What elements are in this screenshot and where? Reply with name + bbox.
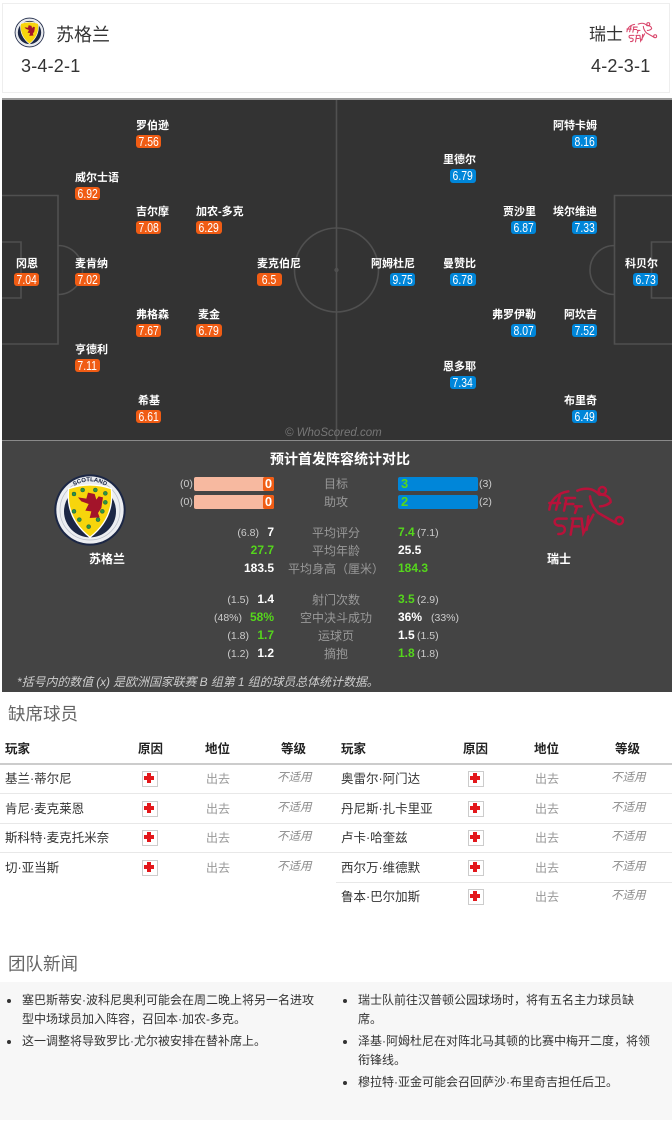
icon: Scotland crest small: [14, 18, 44, 48]
heading: missing players: 缺席球员: [8, 704, 78, 724]
news item: away 1: 席。: [358, 1012, 382, 1026]
row: 肯尼·麦克莱恩: 出去: [206, 802, 230, 816]
player: 布里奇: 6.49: [575, 409, 595, 424]
player: 麦克伯尼: 6.5: [262, 272, 277, 287]
player: 罗伯逊: 7.56: [139, 134, 159, 149]
panel: missing players away table: [336, 740, 672, 910]
stat row: shots: (2.9): [417, 594, 439, 606]
away assists bar: [398, 495, 478, 509]
stat row: dribbles: [227, 628, 439, 643]
stat row: shots: 1.4: [257, 592, 274, 606]
away goals bar: [398, 477, 478, 491]
row: 丹尼斯·扎卡里亚: 出去: [535, 802, 559, 816]
player: 里德尔: 里德尔: [443, 154, 476, 166]
row: 斯科特·麦克托米奈: 斯科特·麦克托米奈: [5, 831, 109, 845]
footnote: *括号内的数值 (x) 是欧洲国家联赛 B 组第 1 组的球员总体统计数据。: [17, 675, 379, 689]
icon: Scotland crest: SCOTLAND: [72, 477, 107, 486]
stat row: average height: 平均身高（厘米）: [288, 562, 384, 576]
stat bars: goals: [180, 476, 492, 491]
away formation: 4-2-3-1: [591, 56, 650, 76]
away assists average: (2): [479, 496, 492, 508]
news item: away 3: 穆拉特·亚金可能会召回萨沙·布里奇吉担任后卫。: [358, 1075, 618, 1089]
home team name: 苏格兰: [56, 25, 110, 45]
stat row: average age: 平均年龄: [312, 544, 360, 558]
player: 希基: 6.61: [139, 409, 159, 424]
stat row: average rating: 7.4: [398, 525, 415, 539]
stat bars: assists: [180, 494, 492, 509]
watermark: © WhoScored.com: [285, 427, 382, 439]
player: 埃尔维迪: 7.33: [575, 220, 595, 235]
player: 阿特卡姆: 阿特卡姆: [553, 120, 597, 132]
panel: team news: [0, 982, 672, 1120]
player: 弗格森: 7.67: [139, 323, 159, 338]
player: 威尔士语: [75, 172, 119, 201]
stat row: tackles: 摘抱: [324, 647, 348, 661]
stats title: 预计首发阵容统计对比: [270, 451, 410, 467]
stat row: tackles: 1.8: [398, 646, 415, 660]
stat row: aerial duels: (48%): [214, 612, 242, 624]
stat row: dribbles: (1.8): [227, 630, 249, 642]
away team name: 瑞士: [589, 25, 623, 44]
player: 里德尔: [443, 154, 476, 183]
player: 麦克伯尼: 麦克伯尼: [257, 258, 301, 270]
stat row: average rating: (6.8): [237, 527, 259, 539]
stat row: dribbles: 运球页: [318, 629, 354, 643]
table header: 等级: [615, 742, 640, 756]
player: 冈恩: [14, 258, 39, 287]
stat row: average height: [244, 561, 428, 576]
player: 麦肯纳: 7.02: [78, 272, 98, 287]
panel: pitch: [2, 98, 672, 441]
row: 西尔万·维德默: 不适用: [611, 861, 646, 873]
news item: away 2: 泽基·阿姆杜尼在对阵北马其顿的比赛中梅开二度，将领: [358, 1034, 650, 1048]
news item: away 2: [336, 1032, 672, 1070]
player: 冈恩: 7.04: [17, 272, 37, 287]
home formation: 3-4-2-1: [21, 56, 80, 76]
player: 恩多耶: [443, 360, 476, 390]
row: 基兰·蒂尔尼: 出去: [206, 772, 230, 786]
row: 卢卡·哈奎兹: [336, 824, 672, 852]
stat row: dribbles: 1.5: [398, 628, 415, 642]
table header: [336, 740, 672, 765]
player: 弗罗伊勒: 弗罗伊勒: [492, 309, 536, 321]
player: 吉尔摩: [136, 206, 169, 235]
player: 恩多耶: 恩多耶: [443, 361, 476, 373]
home assists bar: [194, 495, 274, 509]
stat row: average age: 25.5: [398, 543, 421, 557]
row: 斯科特·麦克托米奈: [5, 830, 312, 846]
row: 鲁本·巴尔加斯: 不适用: [611, 890, 646, 902]
row: 西尔万·维德默: [336, 853, 672, 882]
stat row: shots: (1.5): [227, 594, 249, 606]
news item: away 1: 瑞士队前往汉普顿公园球场时，将有五名主力球员缺: [358, 993, 634, 1007]
news item: home 1: 型中场球员加入阵容，召回本·加农-多克。: [22, 1012, 246, 1026]
player: 弗罗伊勒: [492, 308, 536, 338]
news item: home 2: 这一调整将导致罗比·尤尔被安排在替补席上。: [22, 1034, 266, 1048]
stat row: average height: 183.5: [244, 561, 274, 575]
stat row: tackles: (1.8): [417, 648, 439, 660]
player: 科贝尔: 6.73: [636, 272, 656, 287]
row: 西尔万·维德默: 西尔万·维德默: [341, 861, 420, 875]
row: 鲁本·巴尔加斯: 鲁本·巴尔加斯: [341, 890, 420, 904]
player: 麦金: 6.79: [199, 323, 219, 338]
stat row: average rating: (7.1): [417, 527, 439, 539]
player: 弗格森: 弗格森: [136, 309, 169, 321]
player: 贾沙里: [503, 206, 536, 235]
stat row: average rating: 平均评分: [312, 526, 360, 540]
stat row: dribbles: (1.5): [417, 630, 439, 642]
row: 肯尼·麦克莱恩: [5, 801, 312, 817]
player: 阿姆杜尼: 9.75: [393, 272, 413, 287]
row: 切·亚当斯: 切·亚当斯: [5, 861, 59, 875]
player: 麦克伯尼: [257, 258, 301, 287]
player: 布里奇: 布里奇: [564, 395, 597, 407]
player: 曼赞比: 6.78: [453, 272, 473, 287]
heading: team news: 团队新闻: [8, 954, 78, 974]
row: 斯科特·麦克托米奈: 不适用: [277, 831, 312, 843]
home assists bar: 0: [265, 494, 272, 509]
stat row: aerial duels: 空中决斗成功: [300, 611, 372, 625]
player: 吉尔摩: 吉尔摩: [136, 206, 169, 218]
player: 麦肯纳: [75, 258, 108, 287]
icon: Switzerland logo small: [626, 22, 658, 43]
player: 里德尔: 6.79: [453, 168, 473, 183]
row: 肯尼·麦克莱恩: 肯尼·麦克莱恩: [5, 802, 84, 816]
pitch lines: [2, 100, 672, 440]
player: 冈恩: 冈恩: [16, 258, 38, 270]
news item: home 1: 塞巴斯蒂安·波科尼奥利可能会在周二晚上将另一名进攻: [22, 993, 314, 1007]
player: 阿坎吉: 7.52: [575, 323, 595, 338]
icon: Switzerland logo: [548, 486, 624, 537]
row: 丹尼斯·扎卡里亚: 不适用: [611, 802, 646, 814]
row: 基兰·蒂尔尼: [5, 771, 312, 787]
player: 科贝尔: [625, 258, 658, 287]
player: 阿坎吉: 阿坎吉: [564, 309, 597, 321]
news item: home 1: [0, 991, 336, 1029]
row: 切·亚当斯: [0, 853, 336, 882]
stat row: average age: 27.7: [251, 543, 274, 557]
player: 吉尔摩: 7.08: [139, 220, 159, 235]
row: 奥雷尔·阿门达: 出去: [535, 772, 559, 786]
row: 鲁本·巴尔加斯: 出去: [535, 890, 559, 904]
stat row: tackles: [227, 646, 439, 661]
player: 亨德利: [75, 344, 108, 373]
player: 弗格森: [136, 308, 169, 338]
icon: Scotland crest: [54, 474, 126, 546]
stat row: average rating: [237, 525, 439, 540]
home assists average: (0): [180, 496, 193, 508]
row: 奥雷尔·阿门达: [336, 765, 672, 794]
home goals bar: 0: [265, 476, 272, 491]
away team label: 瑞士: [547, 552, 571, 566]
row: 卢卡·哈奎兹: 不适用: [611, 831, 646, 843]
panel: missing players home table: [0, 742, 336, 876]
home goals average: (0): [180, 478, 193, 490]
row: 斯科特·麦克托米奈: 出去: [206, 831, 230, 845]
player: 加农-多克: [196, 206, 244, 235]
player: 麦肯纳: 麦肯纳: [75, 258, 108, 270]
player: 阿特卡姆: [553, 120, 597, 149]
player: 贾沙里: 贾沙里: [503, 206, 536, 218]
player: 埃尔维迪: 埃尔维迪: [553, 206, 597, 218]
player: 科贝尔: 科贝尔: [625, 258, 658, 270]
row: 丹尼斯·扎卡里亚: 丹尼斯·扎卡里亚: [341, 802, 433, 816]
stat row: aerial duels: 58%: [250, 610, 274, 624]
row: 卢卡·哈奎兹: 卢卡·哈奎兹: [341, 831, 408, 845]
stat row: shots: 射门次数: [312, 593, 360, 607]
player: 麦金: [196, 308, 222, 338]
player: 罗伯逊: 罗伯逊: [136, 120, 169, 132]
player: 阿特卡姆: 8.16: [575, 134, 595, 149]
row: 奥雷尔·阿门达: 奥雷尔·阿门达: [341, 772, 420, 786]
row: 基兰·蒂尔尼: 基兰·蒂尔尼: [5, 772, 72, 786]
news item: away 2: 衔锋线。: [358, 1053, 406, 1067]
player: 贾沙里: 6.87: [514, 220, 534, 235]
home goals bar: [194, 477, 274, 491]
player: 阿姆杜尼: [371, 258, 415, 287]
home team label: 苏格兰: [89, 552, 125, 566]
stat row: tackles: 1.2: [257, 646, 274, 660]
away assists bar: 2: [401, 494, 408, 509]
table header: 等级: [281, 742, 306, 756]
player: 曼赞比: 曼赞比: [443, 258, 476, 270]
away goals bar: 3: [401, 476, 408, 491]
table header: 地位: [205, 742, 230, 756]
row: 鲁本·巴尔加斯: [336, 883, 672, 911]
row: 丹尼斯·扎卡里亚: [336, 794, 672, 823]
goals label: 目标: [324, 477, 348, 491]
table header: 原因: [463, 742, 488, 756]
away goals average: (3): [479, 478, 492, 490]
player: 亨德利: 亨德利: [75, 344, 108, 356]
player: 布里奇: [564, 394, 597, 424]
player: 威尔士语: 威尔士语: [75, 172, 119, 184]
stat row: aerial duels: (33%): [431, 612, 459, 624]
table header: [0, 740, 336, 765]
row: 卢卡·哈奎兹: 出去: [535, 831, 559, 845]
player: 威尔士语: 6.92: [78, 186, 98, 201]
panel: match header: [2, 3, 670, 93]
player: 希基: [136, 394, 161, 424]
player: 恩多耶: 7.34: [453, 375, 473, 390]
row: 奥雷尔·阿门达: 不适用: [611, 772, 646, 784]
stat row: average age: [251, 543, 421, 558]
table header: 原因: [138, 742, 163, 756]
player: 希基: 希基: [138, 395, 160, 407]
stat row: dribbles: 1.7: [257, 628, 274, 642]
table header: 玩家: [341, 742, 366, 756]
stat row: aerial duels: [214, 610, 459, 625]
stat row: aerial duels: 36%: [398, 610, 422, 624]
player: 亨德利: 7.11: [78, 358, 97, 373]
news item: away 1: [336, 991, 672, 1029]
row: 肯尼·麦克莱恩: 不适用: [277, 802, 312, 814]
player: 曼赞比: [443, 258, 476, 287]
row: 切·亚当斯: 出去: [206, 861, 230, 875]
table header: 地位: [534, 742, 559, 756]
player: 加农-多克: 6.29: [199, 220, 219, 235]
player: 罗伯逊: [136, 120, 169, 149]
stat row: tackles: (1.2): [227, 648, 249, 660]
row: 切·亚当斯: 不适用: [277, 861, 312, 873]
assists label: 助攻: [324, 495, 348, 509]
stat row: average rating: 7: [267, 525, 274, 539]
panel: lineup stats comparison: [2, 441, 672, 692]
player: 弗罗伊勒: 8.07: [514, 323, 534, 338]
player: 麦金: 麦金: [198, 309, 220, 321]
player: 埃尔维迪: [553, 206, 597, 235]
row: 基兰·蒂尔尼: 不适用: [277, 772, 312, 784]
row: 西尔万·维德默: 出去: [535, 861, 559, 875]
table header: 玩家: [5, 742, 30, 756]
player: 阿坎吉: [564, 308, 597, 338]
stat row: shots: 3.5: [398, 592, 415, 606]
stat row: average height: 184.3: [398, 561, 428, 575]
stat row: shots: [227, 592, 439, 607]
player: 加农-多克: 加农-多克: [196, 206, 244, 218]
player: 阿姆杜尼: 阿姆杜尼: [371, 258, 415, 270]
